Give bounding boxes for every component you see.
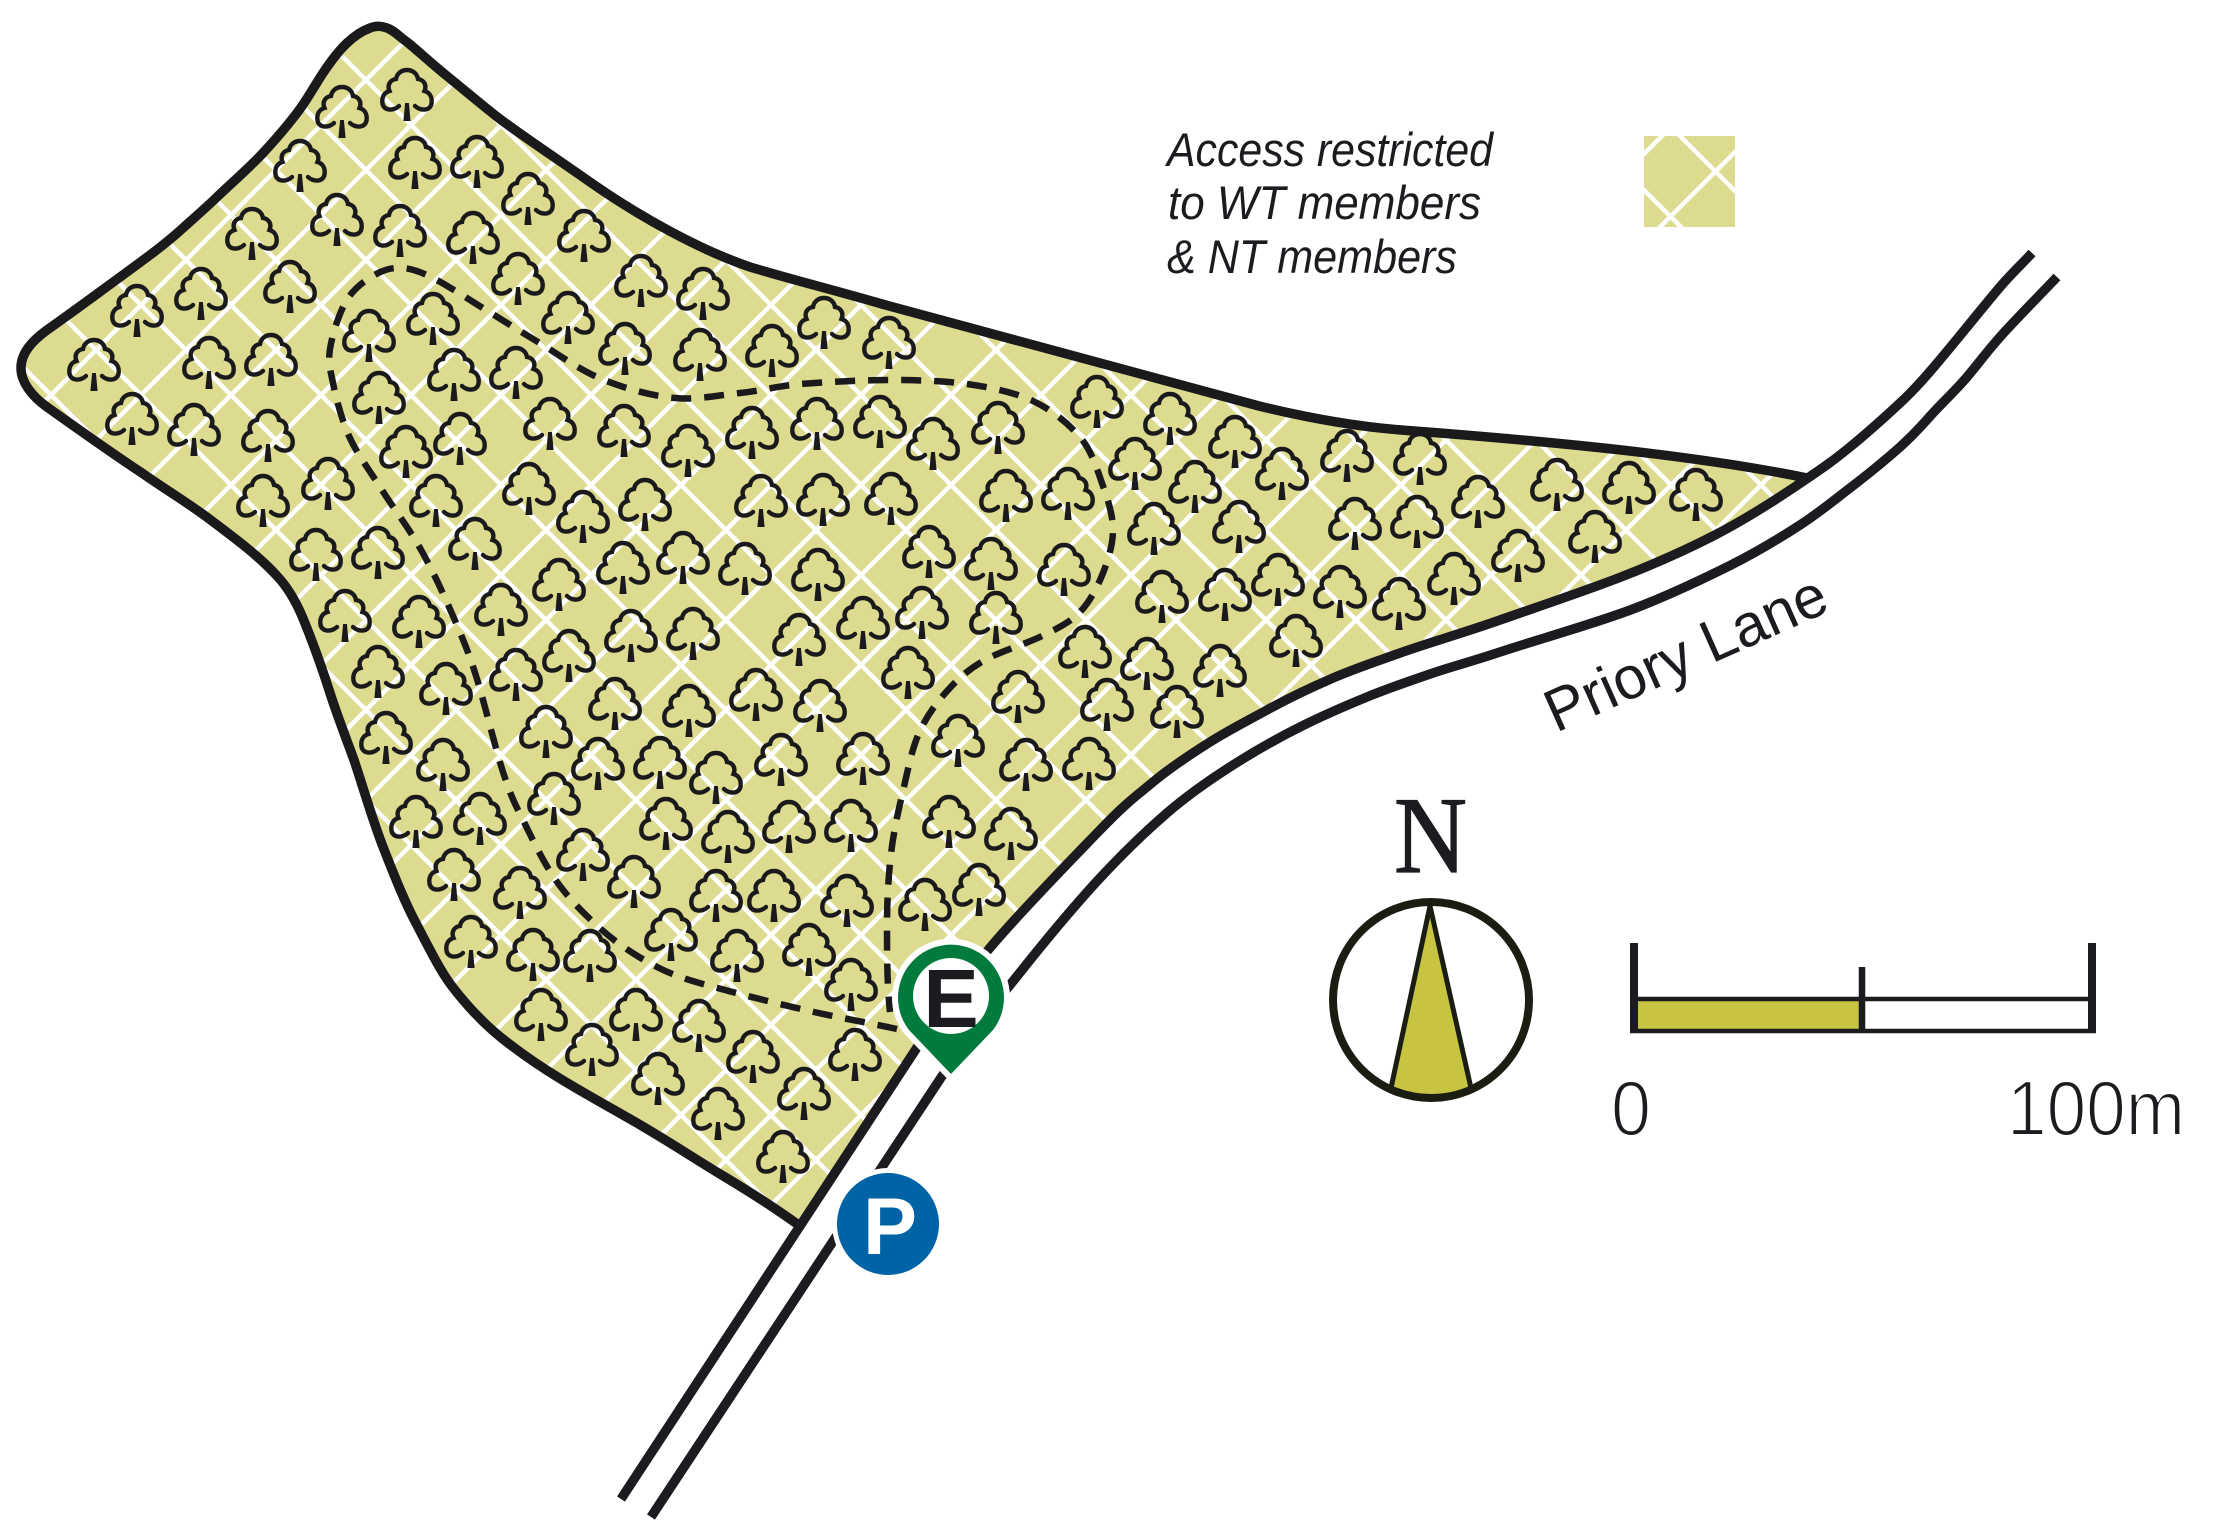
north label: N	[1394, 775, 1467, 896]
road: Priory Lane	[621, 253, 2057, 1517]
woodland fill	[21, 26, 1807, 1226]
woodland boundary line	[21, 26, 1807, 1226]
scale label: 100m: 100m	[2007, 1064, 2185, 1152]
scale bar	[1630, 943, 2096, 1033]
dashed footpath	[329, 268, 1113, 1029]
parking marker: P	[863, 1182, 917, 1272]
legend swatch	[1644, 136, 1735, 227]
wood area: restricted access woodland	[16, 22, 1807, 1228]
entrance marker	[898, 945, 1004, 1074]
compass	[1333, 902, 1529, 1098]
scale label: zero: 0	[1611, 1064, 1651, 1152]
entrance marker: E	[923, 952, 979, 1045]
road label: Priory Lane	[1534, 561, 1837, 745]
legend text: to WT members	[1168, 176, 1481, 229]
legend text: & NT members	[1167, 230, 1457, 283]
parking marker	[832, 1168, 944, 1280]
legend text	[1164, 123, 1495, 283]
legend text: Access restricted	[1164, 123, 1495, 176]
trees	[69, 70, 1721, 1183]
